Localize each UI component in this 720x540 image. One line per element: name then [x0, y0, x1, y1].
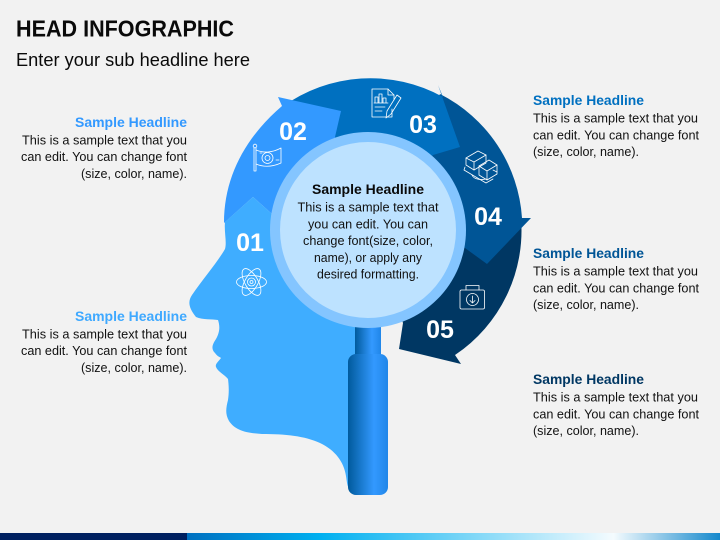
subtitle: Enter your sub headline here — [16, 49, 250, 70]
icon: boxes — [464, 151, 497, 183]
center text: you can edit. You can — [308, 218, 428, 232]
footer bar — [0, 533, 720, 540]
text block: right top: Sample Headline — [533, 92, 644, 108]
text block: right top: can edit. You can change font — [533, 128, 700, 142]
text block: left lower: This is a sample text that you — [22, 328, 187, 342]
text block: right middle: This is a sample text that you — [533, 264, 698, 278]
text block: left upper: (size, color, name). — [81, 167, 187, 181]
center text: change font(size, color, — [303, 234, 433, 248]
text block: left lower: Sample Headline — [75, 308, 187, 324]
center text: name), or apply any — [314, 251, 423, 265]
text block: right top: This is a sample text that you — [533, 112, 698, 126]
text block: right top: (size, color, name). — [533, 145, 639, 159]
number 01: 01 — [236, 229, 264, 257]
text block: left lower: (size, color, name). — [81, 361, 187, 375]
icon: bag with download — [460, 286, 484, 309]
number 02: 02 — [279, 118, 307, 146]
text block: left upper: This is a sample text that you — [22, 134, 187, 148]
text block: right middle: Sample Headline — [533, 245, 644, 261]
center text: This is a sample text that — [298, 200, 439, 214]
text block: left lower — [21, 308, 188, 375]
center text: desired formatting. — [317, 268, 419, 282]
center text — [298, 181, 439, 282]
text block: right bottom — [533, 371, 700, 438]
text block: right middle: can edit. You can change font — [533, 282, 700, 296]
number 04: 04 — [474, 203, 502, 231]
icon: report and pencil — [372, 89, 401, 118]
text block: left upper — [21, 114, 188, 181]
segment 05 arrow — [372, 218, 522, 364]
icon: atom — [236, 266, 266, 298]
text block: right bottom: Sample Headline — [533, 371, 644, 387]
number 05: 05 — [426, 316, 454, 344]
center circle — [270, 132, 466, 328]
segment 04 arrow — [372, 94, 531, 264]
text block: right bottom: (size, color, name). — [533, 424, 639, 438]
segment 02 arrow — [224, 97, 372, 227]
text block: right bottom: This is a sample text that you — [533, 390, 698, 404]
text block: left upper: Sample Headline — [75, 114, 187, 130]
text block: right middle — [533, 245, 700, 312]
text block: right middle: (size, color, name). — [533, 298, 639, 312]
title: HEAD INFOGRAPHIC — [16, 16, 234, 42]
text block: left lower: can edit. You can change font — [21, 344, 188, 358]
segment 01 head silhouette — [189, 197, 372, 488]
icon: flag — [253, 144, 281, 171]
number 03: 03 — [409, 111, 437, 139]
magnifier handle — [348, 354, 388, 495]
center text: Sample Headline — [312, 181, 424, 197]
text block: left upper: can edit. You can change font — [21, 150, 188, 164]
segment 03 arrow — [282, 78, 460, 227]
magnifier neck — [355, 320, 381, 360]
text block: right top — [533, 92, 700, 159]
text block: right bottom: can edit. You can change font — [533, 408, 700, 422]
